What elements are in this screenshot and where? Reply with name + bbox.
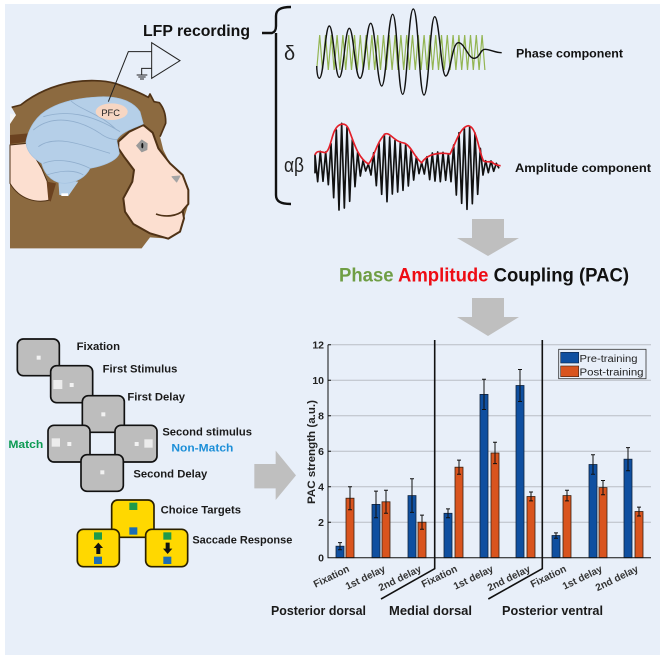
y axis tick labels [312,340,324,564]
x axis labels: Fixation [312,564,351,591]
card: first stimulus [51,366,93,403]
region dividers [381,340,542,599]
ear shadow [47,182,56,202]
x axis labels: 2nd delay [594,564,641,594]
y axis tick labels: 12 [312,340,324,352]
mouth [156,210,184,216]
electrode wire and amplifier [108,43,180,102]
heading: Phase Amplitude Coupling: Phase Amplitude Coupling (PAC) [339,266,629,286]
nose [172,176,180,182]
brain stem tip [61,193,68,196]
x axis labels: Fixation [529,564,568,591]
waveform: phase component [317,9,502,95]
white notch at back of head [10,113,16,124]
y axis title: PAC strength (a.u.) [306,400,318,504]
ear [10,143,50,201]
waveform: amplitude component [315,123,501,210]
head silhouette [10,81,188,248]
label: Second stimulus: Second stimulus [162,427,252,439]
black alpha-beta wave [315,123,499,210]
label: Second Delay: Second Delay [133,469,208,481]
y axis tick labels: 4 [318,482,324,494]
label: First Delay: First Delay [127,391,186,403]
eye [136,139,148,152]
illustration: monkey head with brain and electrode [10,43,188,248]
heading: LFP recording: LFP recording [143,23,250,40]
card: match stimulus [48,425,90,462]
green carrier wave [317,35,485,70]
red envelope [315,124,501,166]
black delta wave [317,9,502,95]
label: phase component: Phase component [516,46,623,60]
grid lines [328,345,651,522]
legend: Post-training [580,368,644,378]
brain stem [58,180,78,196]
label: delta: δ [284,43,295,65]
group label: Medial dorsal: Medial dorsal [389,603,472,618]
axes [328,345,651,558]
card: fixation [17,339,59,376]
label: alpha beta: αβ [284,155,304,177]
y axis tick labels: 8 [318,410,324,422]
y axis tick labels: 6 [318,446,324,458]
group label: Posterior ventral: Posterior ventral [502,603,603,618]
x axis labels: 2nd delay [486,564,533,594]
x axis labels: 2nd delay [377,564,424,594]
bar chart: PAC strength [306,340,651,599]
panel: task sequence [8,339,296,567]
card: saccade down [146,529,188,567]
x axis labels: 1st delay [561,564,605,592]
y axis tick labels: 2 [318,517,324,529]
orange post-training bars [346,453,643,558]
label: Match: Match [8,439,44,451]
x axis labels: Fixation [420,564,459,591]
arrow: task to chart [254,451,296,500]
card: second delay [81,455,123,491]
card: first delay [82,396,124,432]
label: Fixation: Fixation [77,341,120,353]
brain [26,97,143,183]
PFC region [96,103,128,120]
arrow: down to chart [457,298,519,336]
x axis labels: 1st delay [344,564,388,592]
bracket [262,7,291,204]
PFC label: PFC [101,108,120,118]
label: Choice Targets: Choice Targets [161,504,241,516]
y axis tick labels: 0 [318,552,324,564]
card: choice targets [112,500,154,537]
y axis tick labels: 10 [312,375,324,387]
label: Saccade Response: Saccade Response [192,534,292,546]
label: First Stimulus: First Stimulus [103,364,177,376]
error bars [338,370,641,550]
label: amplitude component: Amplitude component [515,161,651,175]
face [118,125,188,239]
neck band [10,133,28,144]
legend: Pre-training [580,354,638,365]
card: saccade up [77,529,119,567]
card: non-match stimulus [115,425,157,462]
x axis labels [312,564,641,594]
label: Non-Match: Non-Match [171,443,234,455]
legend [559,349,646,379]
group label: Posterior dorsal: Posterior dorsal [271,603,366,618]
head top outline [12,81,166,137]
arrow: down to PAC [457,219,519,256]
blue pre-training bars [336,386,632,558]
x axis labels: 1st delay [452,564,496,592]
